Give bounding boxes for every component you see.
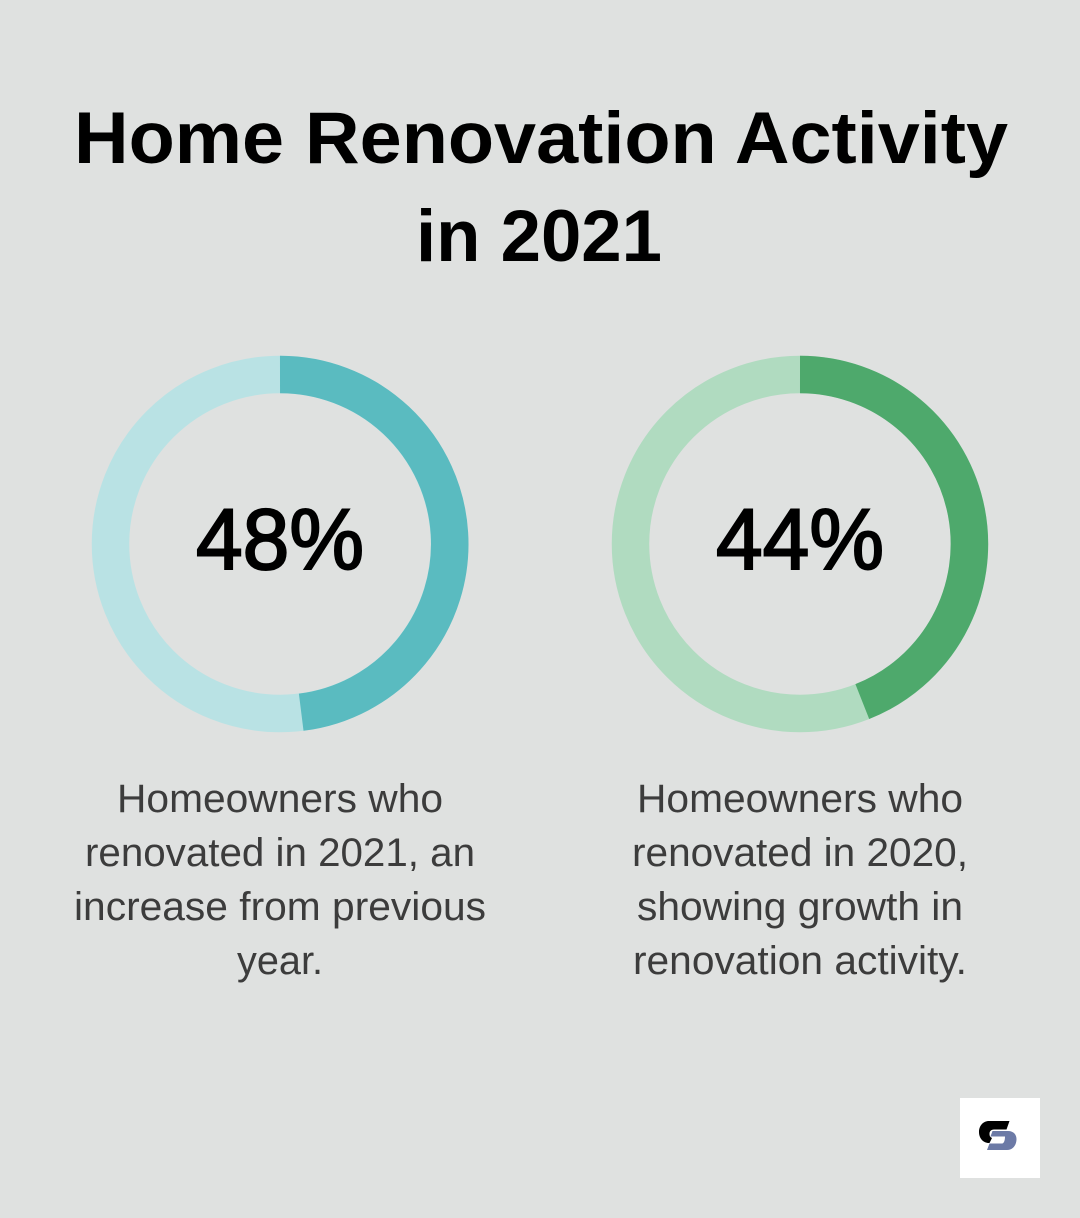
description: 2021: year. [237, 939, 323, 983]
donut chart: 48% [110, 374, 450, 714]
description: 2020: renovated in 2020, [632, 831, 968, 875]
title: in 2021 [416, 196, 662, 277]
icon: logo mark [979, 1121, 1016, 1150]
logo badge [960, 1098, 1040, 1178]
description: 2021: renovated in 2021, an [85, 831, 475, 875]
panel: 48% homeowners 2021 [74, 374, 486, 983]
description: 2020: Homeowners who [637, 777, 963, 821]
title [74, 98, 1008, 277]
description: 2021 [74, 777, 486, 983]
panel: 44% homeowners 2020 [630, 374, 970, 983]
value: 48%: 48% [196, 492, 364, 588]
title: Home Renovation Activity [74, 98, 1008, 179]
description: 2020 [632, 777, 968, 983]
description: 2021: increase from previous [74, 885, 486, 929]
description: 2020: showing growth in [637, 885, 963, 929]
donut chart: 44% [630, 374, 970, 714]
value: 44%: 44% [716, 492, 884, 588]
description: 2020: renovation activity. [633, 939, 967, 983]
description: 2021: Homeowners who [117, 777, 443, 821]
